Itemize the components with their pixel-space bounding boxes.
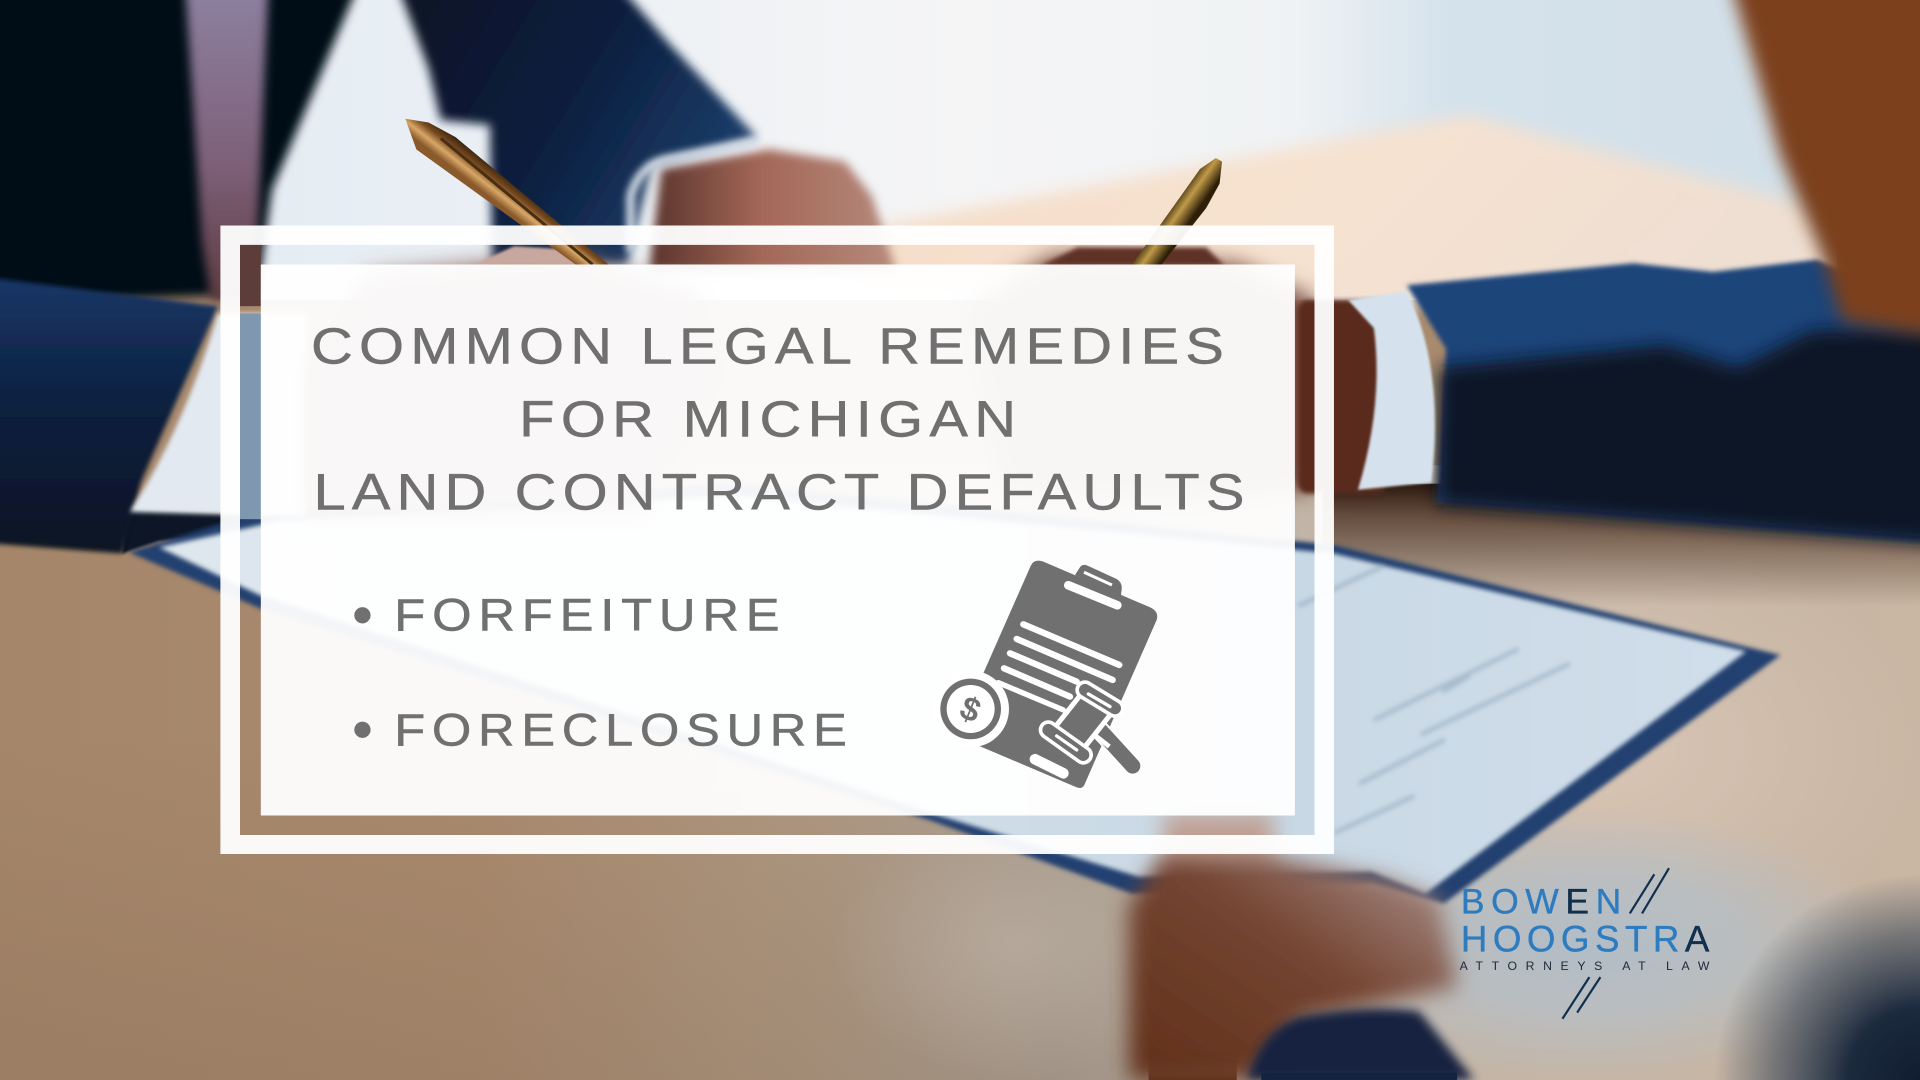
logo: Bowen Hoogstra Attorneys at Law [1460,868,1710,1019]
clipboard body [979,561,1157,788]
bullet list: FORFEITURE [394,590,780,641]
bottom hand [1129,857,1457,1080]
logo name line 1: BOWEN [1461,881,1621,921]
right pen [1130,158,1222,267]
wall backdrop [245,0,1837,300]
logo slashes [1562,868,1669,1019]
bottom sleeve [1247,1009,1474,1080]
dollar coin [932,671,1009,747]
tie [184,0,269,300]
upper hand [649,149,896,272]
gavel [1048,690,1133,766]
right sleeve [1407,260,1920,545]
upper cuff [631,142,757,251]
bullet list: FORECLOSURE [394,705,847,756]
title: COMMON LEGAL REMEDIES [311,318,1224,375]
left person torso [0,0,367,306]
left sleeve [0,274,218,553]
icon: clipboard, coin and gavel [932,561,1157,788]
double frame [220,226,1334,854]
right person arm skin [1725,0,1920,340]
hands under the panel [306,255,1316,874]
dollar coin: $ [955,689,986,731]
title: FOR MICHIGAN [519,391,1016,448]
logo name line 2: HOOGSTRA [1461,918,1710,959]
envelope shape on the table [857,115,1832,306]
bullet list [354,590,847,756]
left pen [405,119,609,264]
left hand knuckle above the panel [471,246,602,266]
logo tagline: ATTORNEYS AT LAW [1460,959,1710,973]
upper sleeve [389,0,757,264]
title: LAND CONTRACT DEFAULTS [313,464,1245,521]
right cuff [1348,291,1435,490]
right wrist [1298,300,1386,493]
right hand above the panel [1041,247,1224,266]
dark area at frame top-left [240,245,261,306]
dark area under left cuff [122,508,263,553]
left cuff [130,313,306,517]
wooden table [0,465,1920,1080]
clipboard tab [1075,565,1122,602]
contract document [129,484,1780,904]
content panel [261,264,1295,816]
title [311,318,1245,521]
text lines [998,624,1119,710]
